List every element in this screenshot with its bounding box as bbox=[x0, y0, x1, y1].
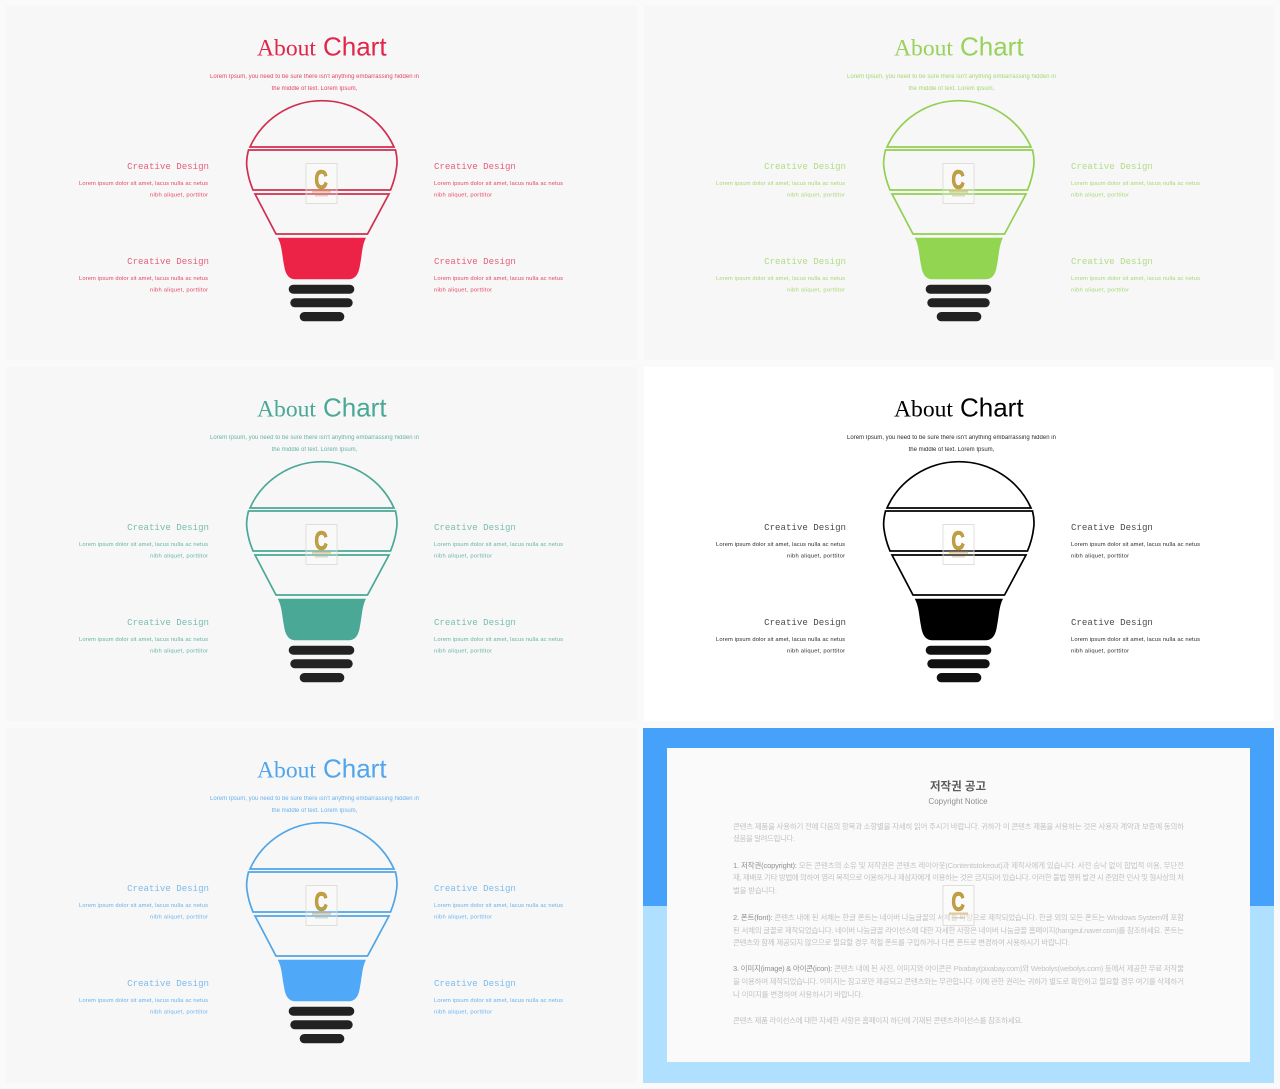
panel: copyright notice bbox=[643, 728, 1274, 1083]
label: bottom left: Creative Design bbox=[127, 256, 209, 267]
label: top left bbox=[79, 161, 209, 198]
label: top right: nibh aliquet, porttitor bbox=[1071, 554, 1129, 560]
text block: image and icon: 나 이미지를 변경하여 사용하시기 바랍니다. bbox=[733, 989, 863, 999]
title: About Chart teal: About Chart bbox=[257, 393, 387, 423]
watermark logo: C bbox=[952, 526, 965, 555]
label: bottom left: nibh aliquet, porttitor bbox=[150, 288, 208, 294]
subtitle text red: the middle of text. Lorem Ipsum, bbox=[272, 86, 358, 92]
label: bottom left: Lorem ipsum dolor sit amet, lacus nulla ac netus bbox=[79, 998, 208, 1004]
label: top left bbox=[716, 161, 846, 198]
label: top right: Lorem ipsum dolor sit amet, lacus nulla ac netus bbox=[1071, 542, 1200, 548]
label: top left bbox=[79, 522, 209, 560]
text block: font bbox=[733, 912, 1184, 947]
label: top right: nibh aliquet, porttitor bbox=[434, 554, 492, 560]
label: bottom right: nibh aliquet, porttitor bbox=[434, 1010, 492, 1016]
subtitle text green bbox=[847, 74, 1056, 92]
label: bottom left: Lorem ipsum dolor sit amet, lacus nulla ac netus bbox=[79, 637, 208, 643]
watermark logo: C bbox=[952, 165, 965, 194]
label: top left: Creative Design bbox=[127, 522, 209, 533]
label: bottom right: Creative Design bbox=[434, 978, 516, 989]
panel: green bulb slide bbox=[644, 6, 1274, 360]
label: bottom left bbox=[79, 978, 209, 1016]
label: bottom right: Lorem ipsum dolor sit amet, lacus nulla ac netus bbox=[434, 637, 563, 643]
text block: font: 콘텐츠와 함께 제공되지 않으므로 필요할 경우 적절 폰트를 구입하거나 다른 폰트로 변경하여 사용하시기 바랍니다. bbox=[733, 937, 1070, 947]
watermark logo: C bbox=[314, 526, 328, 555]
subtitle text blue bbox=[210, 796, 419, 814]
label: top right: Creative Design bbox=[434, 522, 516, 533]
watermark logo bbox=[943, 164, 974, 204]
label: bottom right bbox=[434, 256, 563, 294]
icon: light bulb teal bbox=[247, 462, 397, 682]
label: bottom left bbox=[79, 617, 209, 654]
label: bottom right: nibh aliquet, porttitor bbox=[1071, 648, 1129, 654]
text block: license footer: 콘텐츠 제품 라이선스에 대한 자세한 사항은 홈페이지 하단에 기재된 콘텐츠라이선스를 참조하세요. bbox=[733, 1015, 1023, 1025]
label: top right bbox=[434, 883, 563, 920]
panel: blue bulb slide bbox=[6, 728, 637, 1083]
label: top left: Lorem ipsum dolor sit amet, lacus nulla ac netus bbox=[79, 903, 208, 909]
label: top right bbox=[1071, 522, 1200, 560]
label: top right: Lorem ipsum dolor sit amet, lacus nulla ac netus bbox=[434, 903, 563, 909]
icon: light bulb black bbox=[884, 462, 1034, 682]
label: top right: nibh aliquet, porttitor bbox=[1071, 192, 1129, 198]
text block: intro bbox=[733, 821, 1184, 843]
label: top left: Creative Design bbox=[127, 883, 209, 894]
label: bottom right: nibh aliquet, porttitor bbox=[1071, 288, 1129, 294]
watermark logo bbox=[306, 524, 337, 564]
label: bottom left: nibh aliquet, porttitor bbox=[150, 648, 208, 654]
text block: intro: 콘텐츠 제품을 사용하기 전에 다음의 항목과 소항별을 자세히 읽어 주시기 바랍니다. 귀하가 이 콘텐츠 제품을 사용하는 것은 사용자 계약과 보증에 동의하 bbox=[733, 821, 1184, 831]
title: About Chart black: About Chart bbox=[894, 393, 1024, 423]
label: bottom right: Lorem ipsum dolor sit amet, lacus nulla ac netus bbox=[434, 276, 563, 282]
text block: copyright: 1. 저작권(copyright): 모든 콘텐츠의 소유 및 저작권은 콘텐츠 레이아웃(Contentstokeout)과 제작사에게 있습니다. 사전 승낙 없이 합법적 이용, 무단전 bbox=[733, 860, 1184, 870]
text block: font: 2. 폰트(font): 콘텐츠 내에 된 서체는 한글 폰트는 네이버 나눔글꼴의 서체를 바탕으로 제작되었습니다. 한글 외의 모든 폰트는 Windows System에 포함 bbox=[733, 912, 1184, 922]
label: top right bbox=[1071, 161, 1200, 198]
label: top right: nibh aliquet, porttitor bbox=[434, 914, 492, 920]
label: bottom right: Lorem ipsum dolor sit amet, lacus nulla ac netus bbox=[1071, 637, 1200, 643]
label: top right: Lorem ipsum dolor sit amet, lacus nulla ac netus bbox=[1071, 181, 1200, 187]
subtitle text red bbox=[210, 74, 419, 92]
label: bottom left: nibh aliquet, porttitor bbox=[150, 1010, 208, 1016]
subtitle text teal: the middle of text. Lorem Ipsum, bbox=[272, 447, 358, 453]
watermark logo: C bbox=[952, 887, 965, 916]
subtitle text black: Lorem Ipsum, you need to be sure there isn't anything embarrassing hidden in bbox=[847, 435, 1056, 441]
label: top left: nibh aliquet, porttitor bbox=[150, 192, 208, 198]
watermark logo: C bbox=[314, 887, 328, 916]
label: bottom left: Lorem ipsum dolor sit amet, lacus nulla ac netus bbox=[716, 637, 845, 643]
label: bottom left: Creative Design bbox=[127, 978, 209, 989]
watermark logo bbox=[306, 164, 337, 204]
watermark logo: C bbox=[314, 165, 328, 194]
label: bottom right: Creative Design bbox=[1071, 256, 1153, 267]
subtitle text green: the middle of text. Lorem Ipsum, bbox=[909, 86, 995, 92]
label: bottom right: Creative Design bbox=[1071, 617, 1153, 628]
label: top left: Creative Design bbox=[127, 161, 209, 172]
text block: copyright bbox=[733, 860, 1184, 895]
icon: light bulb red bbox=[247, 101, 397, 321]
label: top right: Lorem ipsum dolor sit amet, lacus nulla ac netus bbox=[434, 181, 563, 187]
label: top left: nibh aliquet, porttitor bbox=[787, 554, 845, 560]
label: top right: nibh aliquet, porttitor bbox=[434, 192, 492, 198]
label: bottom right: Lorem ipsum dolor sit amet, lacus nulla ac netus bbox=[1071, 276, 1200, 282]
panel: red bulb slide bbox=[6, 6, 637, 360]
label: top right: Creative Design bbox=[434, 883, 516, 894]
label: top left: Lorem ipsum dolor sit amet, lacus nulla ac netus bbox=[79, 181, 208, 187]
label: bottom left: Lorem ipsum dolor sit amet, lacus nulla ac netus bbox=[79, 276, 208, 282]
subtitle text teal: Lorem Ipsum, you need to be sure there isn't anything embarrassing hidden in bbox=[210, 435, 419, 441]
subtitle text blue: the middle of text. Lorem Ipsum, bbox=[272, 808, 358, 814]
panel: teal bulb slide bbox=[6, 367, 637, 721]
label: top right: Creative Design bbox=[434, 161, 516, 172]
subtitle text black bbox=[847, 435, 1056, 453]
label: bottom left: Creative Design bbox=[127, 617, 209, 628]
text block: copyright: 재, 재배포 기타 방법에 의하여 영리 목적으로 이용하거나 제삼자에게 이용하는 것은 금지되어 있습니다. 이러한 불법 행위 발견 시 준엄한 민사 및 형사상의 처 bbox=[733, 872, 1184, 882]
label: bottom right bbox=[1071, 617, 1200, 654]
label: bottom left bbox=[716, 617, 846, 654]
label: bottom right: nibh aliquet, porttitor bbox=[434, 648, 492, 654]
panel: black bulb slide bbox=[644, 367, 1274, 721]
label: top left: nibh aliquet, porttitor bbox=[150, 914, 208, 920]
subtitle text red: Lorem Ipsum, you need to be sure there isn't anything embarrassing hidden in bbox=[210, 74, 419, 80]
icon: light bulb blue bbox=[247, 823, 397, 1043]
heading: copyright notice: Copyright Notice bbox=[928, 797, 988, 806]
label: top right bbox=[434, 161, 563, 198]
label: top left: nibh aliquet, porttitor bbox=[787, 192, 845, 198]
label: bottom right bbox=[434, 978, 563, 1016]
label: bottom right: Lorem ipsum dolor sit amet, lacus nulla ac netus bbox=[434, 998, 563, 1004]
text block: image and icon: 을 이용하여 제작되었습니다. 이미지는 참고로만 제공되고 콘텐츠와는 무관합니다. 이에 관한 권리는 귀하가 별도로 확인하고 필요할 경우 여기를 삭제하거 bbox=[733, 976, 1184, 986]
watermark logo bbox=[306, 886, 337, 926]
label: top left: Creative Design bbox=[764, 522, 846, 533]
label: bottom left: Lorem ipsum dolor sit amet, lacus nulla ac netus bbox=[716, 276, 845, 282]
label: bottom left: nibh aliquet, porttitor bbox=[787, 648, 845, 654]
text block: image and icon: 3. 이미지(image) & 아이콘(icon): 콘텐츠 내에 된 사진, 이미지와 아이콘은 Pixabay(pixabay.com)와 Webolys(webolys.com) 등에서 제공한 무료 저작물 bbox=[733, 963, 1184, 973]
subtitle text teal bbox=[210, 435, 419, 453]
label: bottom left: Creative Design bbox=[764, 256, 846, 267]
subtitle text blue: Lorem Ipsum, you need to be sure there isn't anything embarrassing hidden in bbox=[210, 796, 419, 802]
label: top right bbox=[434, 522, 563, 560]
text block: copyright: 벌을 받습니다. bbox=[733, 885, 777, 895]
label: top right: Creative Design bbox=[1071, 161, 1153, 172]
label: bottom right bbox=[1071, 256, 1200, 294]
subtitle text green: Lorem Ipsum, you need to be sure there isn't anything embarrassing hidden in bbox=[847, 74, 1056, 80]
label: bottom left: Creative Design bbox=[764, 617, 846, 628]
label: top left: Lorem ipsum dolor sit amet, lacus nulla ac netus bbox=[79, 542, 208, 548]
label: bottom left bbox=[716, 256, 846, 294]
label: bottom right bbox=[434, 617, 563, 654]
label: top left: Lorem ipsum dolor sit amet, lacus nulla ac netus bbox=[716, 542, 845, 548]
watermark logo bbox=[943, 524, 974, 564]
icon: light bulb green bbox=[884, 101, 1034, 321]
label: top left: Lorem ipsum dolor sit amet, lacus nulla ac netus bbox=[716, 181, 845, 187]
label: top right: Creative Design bbox=[1071, 522, 1153, 533]
title: About Chart red: About Chart bbox=[257, 32, 387, 62]
heading: copyright notice: 저작권 공고 bbox=[930, 779, 986, 793]
label: top right: Lorem ipsum dolor sit amet, lacus nulla ac netus bbox=[434, 542, 563, 548]
text block: intro: 셨음을 알려드립니다. bbox=[733, 833, 795, 843]
text block: image and icon bbox=[733, 963, 1184, 999]
label: bottom left bbox=[79, 256, 209, 294]
text block: font: 된 서체의 글꼴로 제작되었습니다. 네이버 나눔글꼴 라이선스에 대한 자세한 사항은 네이버 나눔글꼴 홈페이지(hangeul.naver.com)를 참조하세요. 폰트는 bbox=[733, 925, 1184, 935]
label: bottom right: nibh aliquet, porttitor bbox=[434, 288, 492, 294]
label: bottom right: Creative Design bbox=[434, 256, 516, 267]
label: top left bbox=[716, 522, 846, 560]
label: top left: nibh aliquet, porttitor bbox=[150, 554, 208, 560]
watermark logo bbox=[943, 886, 974, 926]
subtitle text black: the middle of text. Lorem Ipsum, bbox=[909, 447, 995, 453]
label: bottom right: Creative Design bbox=[434, 617, 516, 628]
label: bottom left: nibh aliquet, porttitor bbox=[787, 288, 845, 294]
title: About Chart blue: About Chart bbox=[257, 754, 387, 784]
label: top left: Creative Design bbox=[764, 161, 846, 172]
heading: copyright notice bbox=[928, 779, 988, 806]
title: About Chart green: About Chart bbox=[894, 32, 1024, 62]
label: top left bbox=[79, 883, 209, 920]
